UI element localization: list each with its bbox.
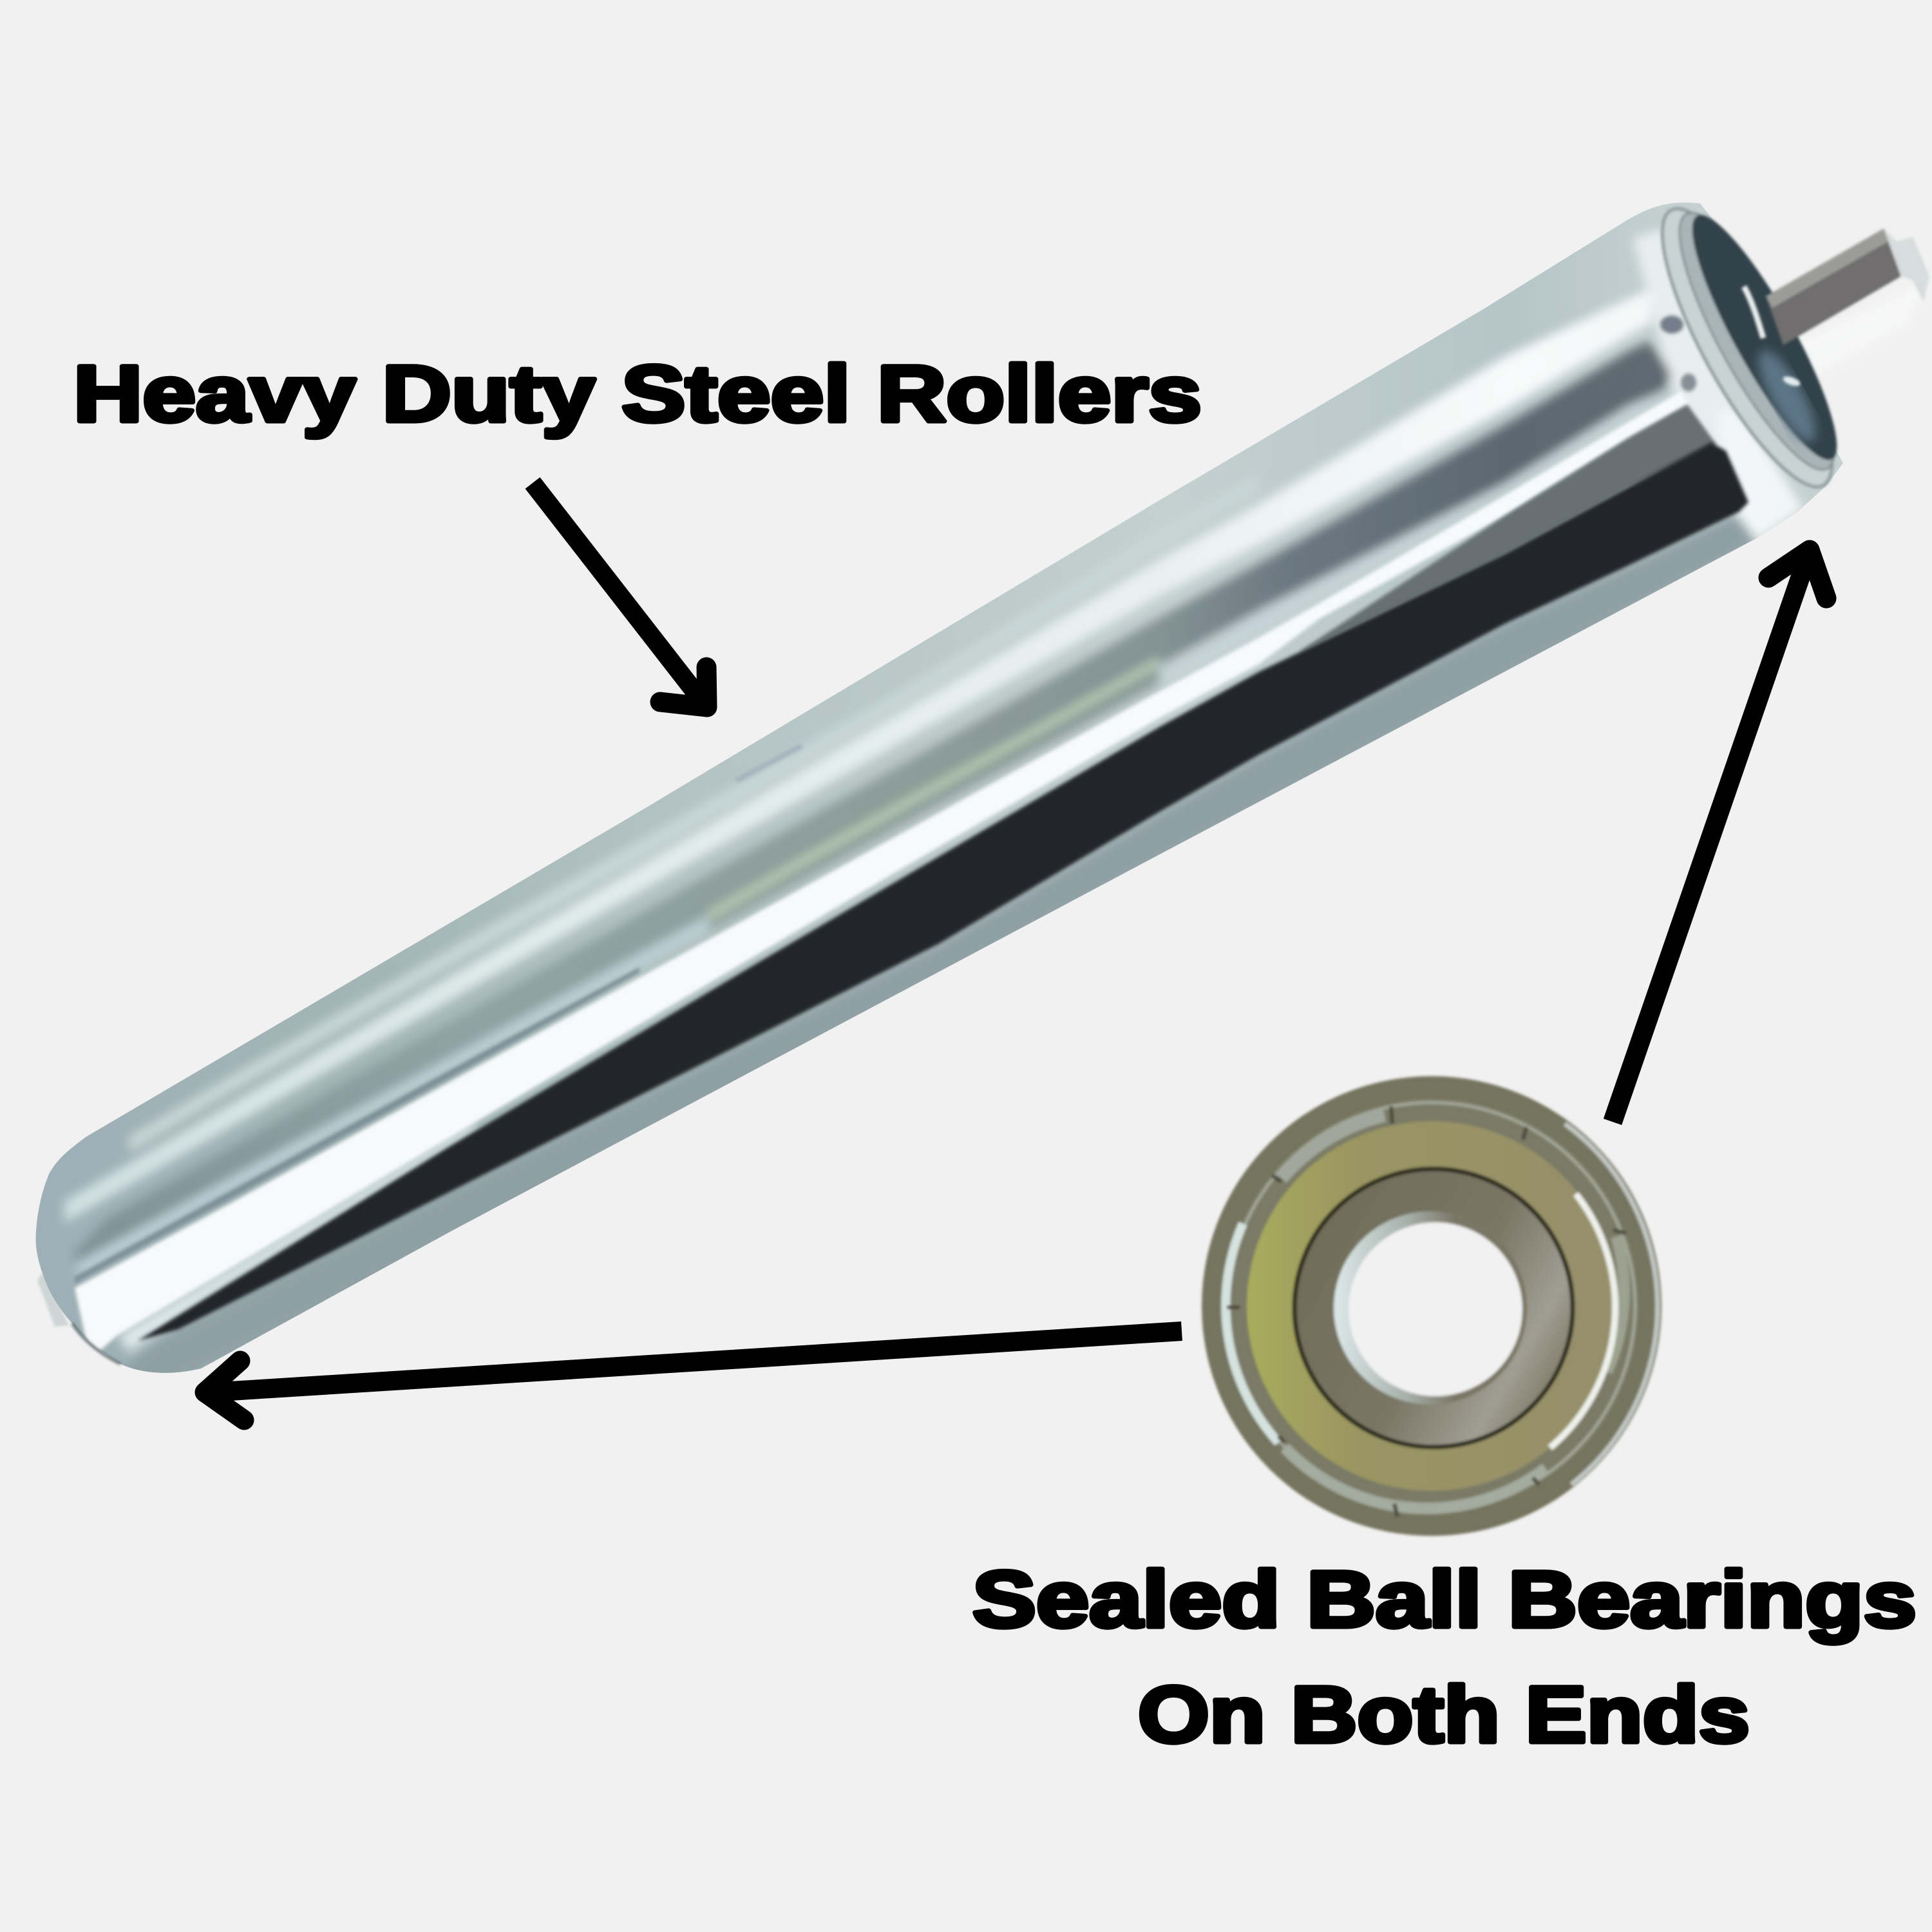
bearing hub glints — [1744, 287, 1801, 388]
caption: sealed ball bearings: On Both Ends — [1138, 1671, 1750, 1759]
collar spots — [1660, 316, 1696, 392]
caption: sealed ball bearings — [972, 1555, 1917, 1759]
upper gray stripe near dark — [1301, 404, 1716, 652]
groove ticks — [1227, 1106, 1626, 1517]
groove glints — [1226, 1115, 1624, 1508]
outer ring — [1202, 1076, 1662, 1536]
end face — [1671, 202, 1858, 473]
bore hole — [1349, 1222, 1522, 1396]
white reflection stripe — [75, 392, 1689, 1359]
arrow to right bearing — [1613, 550, 1826, 1122]
left cap arc — [72, 1323, 120, 1364]
roller body — [36, 202, 1843, 1373]
outer ring highlight — [1565, 1124, 1658, 1484]
right shaft reflection — [1787, 277, 1932, 380]
thin top streak — [736, 746, 802, 781]
inner seam — [1294, 1169, 1573, 1447]
caption: sealed ball bearings: Sealed Ball Bearings — [972, 1555, 1917, 1644]
right shaft — [1766, 229, 1929, 345]
dark reflection stripe — [138, 442, 1748, 1341]
roller — [0, 161, 1932, 1417]
thin dark crease — [75, 967, 639, 1283]
blue face highlight — [1748, 343, 1826, 449]
arrow to roller — [533, 483, 707, 707]
arrow to left bearing — [205, 1331, 1182, 1420]
end rim — [1634, 190, 1861, 506]
bore chamfer — [1334, 1211, 1527, 1405]
shield — [1247, 1121, 1616, 1491]
ball bearing — [1202, 1076, 1662, 1536]
left shaft stub — [37, 1272, 69, 1327]
shield edge highlight — [1550, 1194, 1615, 1448]
groove — [1224, 1099, 1639, 1513]
heading: steel rollers: Heavy Duty Steel Rollers — [73, 350, 1202, 439]
infographic canvas — [36, 202, 1929, 1745]
